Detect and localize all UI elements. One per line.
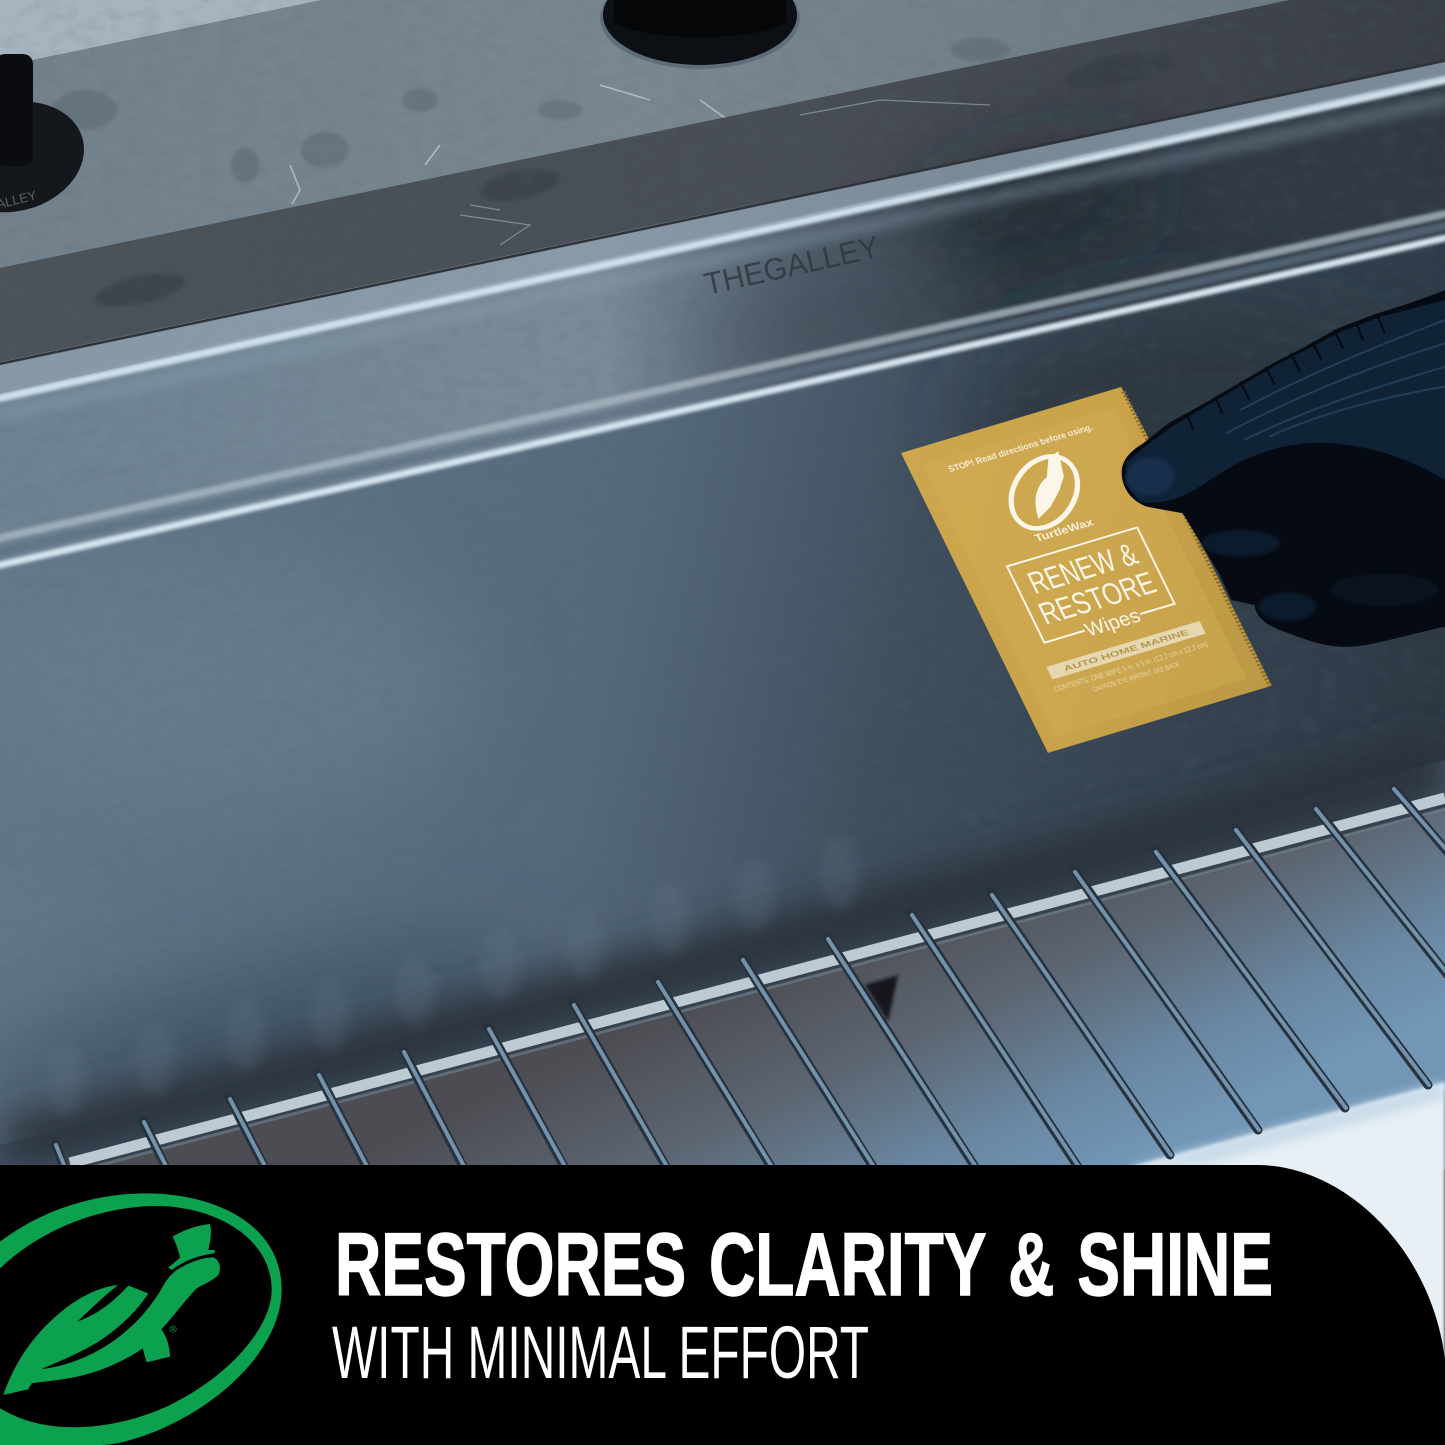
upper finger highlight — [1125, 300, 1445, 503]
packet body — [901, 386, 1272, 753]
product name box: RENEW & — [1022, 536, 1143, 600]
product name box — [1007, 527, 1180, 654]
panel fold line and upper rail highlight — [0, 61, 1445, 565]
packet brand name: TurtleWax — [1033, 516, 1097, 545]
lower shadow band under panel — [0, 735, 1445, 1165]
steel mid panel — [0, 59, 1445, 565]
warning line: STOP! Read directions before using. — [946, 422, 1094, 474]
registered mark: ® — [169, 1324, 177, 1335]
stone front face — [0, 0, 1445, 362]
light counter strip top left — [0, 0, 322, 66]
product name box: RESTORE — [1033, 565, 1162, 631]
wipe packet — [901, 386, 1272, 753]
peg left — [0, 54, 97, 228]
caution text: CAUTION: EYE IRRITANT. SEE BACK — [1092, 661, 1181, 694]
gloved hand — [1122, 290, 1445, 647]
glove silhouette — [1122, 290, 1445, 647]
serrated edge — [1123, 391, 1270, 687]
white surface lower right — [1125, 1082, 1445, 1445]
packet crimp seams — [922, 408, 1247, 736]
dark bracket under rail — [865, 975, 898, 1022]
stone countertop surface — [0, 0, 1290, 268]
steel lower panel — [0, 237, 1445, 1145]
grill wires — [55, 787, 1445, 1170]
fingertip — [1127, 457, 1174, 496]
lower finger sheen — [1201, 530, 1439, 621]
subheading: WITH MINIMAL EFFORT — [332, 1311, 869, 1394]
packet turtle logo — [975, 435, 1114, 550]
embossed maker mark: THEGALLEY — [701, 229, 882, 302]
use strip — [1046, 621, 1206, 679]
turtle wax logo — [0, 1193, 282, 1445]
grill floor — [60, 800, 1445, 1170]
logo oval ring — [0, 1193, 282, 1445]
use strip: AUTO HOME MARINE — [1062, 628, 1191, 673]
lower panel soft shading — [0, 310, 1430, 1151]
knuckle ridges — [1186, 315, 1385, 430]
peg right — [600, 0, 800, 69]
stone blotches and cracks — [53, 38, 1010, 204]
panel scallop reflections — [45, 839, 860, 1116]
contents text: CONTENTS: ONE WIPE 5 in. x 5 in. (12.7 cm x 12.7 cm) — [1052, 640, 1210, 694]
stone face patches and scratches — [93, 45, 1177, 313]
grill rail — [70, 798, 1445, 1173]
glove folds — [1226, 320, 1445, 440]
top hat — [168, 1224, 215, 1270]
dark reflection on steel — [695, 141, 1165, 387]
bottom banner — [0, 1165, 1445, 1445]
product name box: Wipes — [1081, 605, 1144, 641]
turtle body — [3, 1257, 220, 1395]
